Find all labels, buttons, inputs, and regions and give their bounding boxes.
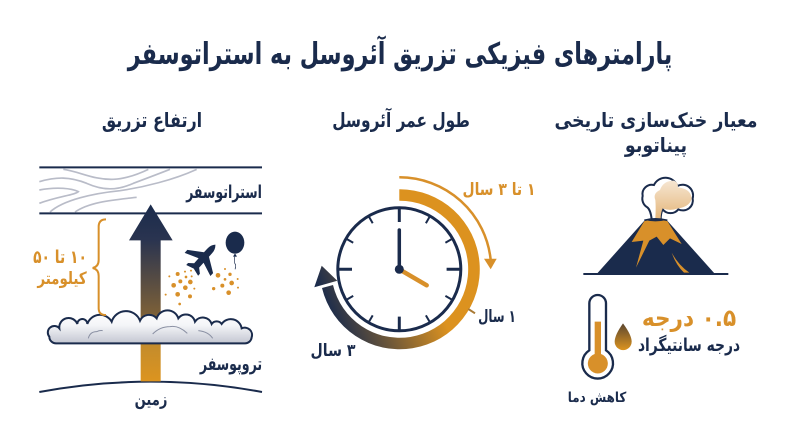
title: پارامترهای فیزیکی تزریق آئروسل به استراتوسفر bbox=[126, 34, 672, 72]
icon: thermometer bbox=[582, 295, 613, 379]
label: temperature decrease: کاهش دما bbox=[568, 390, 627, 406]
label: 10 to 50: ۱۰ تا ۵۰ bbox=[33, 246, 87, 267]
clock ticks bbox=[338, 208, 461, 331]
aerosol particles bbox=[165, 268, 239, 305]
stratosphere wavy bands bbox=[39, 169, 197, 212]
label: troposphere: تروپوسفر bbox=[199, 354, 262, 376]
thin orange arrow bbox=[399, 177, 497, 269]
ring tick marks bbox=[468, 309, 475, 313]
cloud bbox=[48, 310, 252, 343]
label: kilometers: کیلومتر bbox=[36, 268, 87, 288]
icon: smoke bbox=[642, 178, 693, 219]
label: 3 years: ۳ سال bbox=[311, 341, 356, 360]
stratosphere boundary lines bbox=[39, 167, 262, 213]
label: 1 to 3 years: ۱ تا ۳ سال bbox=[462, 180, 536, 199]
label: stratosphere: استراتوسفر bbox=[185, 182, 262, 203]
icon: volcano bbox=[583, 219, 728, 274]
value: 0.5 degrees: ۰.۵ درجه bbox=[642, 305, 736, 332]
ground curve bbox=[39, 382, 262, 392]
clock hands bbox=[395, 230, 427, 285]
heading: aerosol lifetime: طول عمر آئروسل bbox=[332, 107, 470, 133]
label: earth: زمین bbox=[135, 389, 167, 409]
brace bbox=[93, 219, 106, 315]
clock face bbox=[338, 208, 461, 331]
icon: balloon bbox=[226, 232, 244, 269]
panel: volcano and temperature bbox=[568, 178, 740, 406]
label: degrees celsius: درجه سانتیگراد bbox=[638, 334, 740, 355]
icon: airplane bbox=[179, 233, 228, 282]
panel: clock bbox=[311, 177, 536, 360]
lifetime ring arrow bbox=[314, 189, 480, 349]
heading: historical cooling benchmark: معیار خنک‌سازی تاریخی bbox=[554, 110, 758, 132]
icon: drop bbox=[615, 323, 632, 350]
rising arrow bbox=[129, 204, 173, 381]
heading: injection altitude: ارتفاع تزریق bbox=[102, 109, 202, 133]
label: 1 year: ۱ سال bbox=[478, 307, 516, 327]
heading: historical cooling benchmark: پیناتوبو bbox=[624, 135, 687, 157]
panel: altitude diagram bbox=[33, 167, 262, 409]
